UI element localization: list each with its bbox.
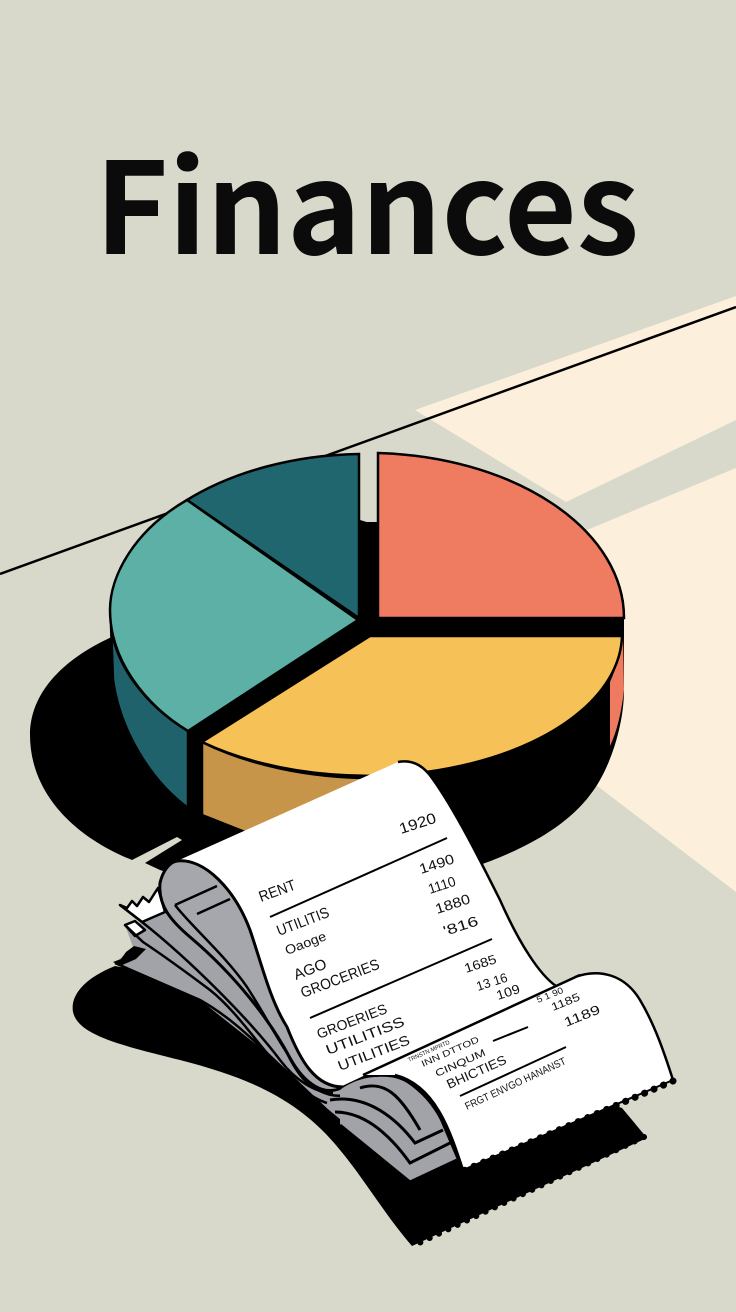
back sheets: grey body [115, 905, 360, 1140]
horizon line [0, 307, 736, 574]
fold detail lines [175, 886, 347, 1096]
pie chart [110, 453, 624, 850]
labels block: UTILITIS [274, 904, 332, 940]
amounts column: 1110 [426, 873, 458, 897]
title: Finances [95, 107, 639, 291]
amount 1920: 1920 [397, 810, 438, 838]
labels block: GROCERIES [298, 956, 382, 1002]
amounts column [417, 850, 480, 939]
light beam: upper [415, 296, 736, 502]
labels block: AGO [291, 956, 329, 984]
receipt top text [257, 810, 522, 1074]
back sheet: second tab [125, 921, 145, 936]
back sheet: black torn tip [113, 946, 146, 966]
flap labels: INN DTTOD [420, 1034, 481, 1069]
divider 2 [310, 939, 492, 1018]
pie black base [112, 522, 624, 850]
labels block [274, 904, 382, 1002]
flap labels: BHICTIES [444, 1052, 509, 1092]
lower flap stack lines [330, 1086, 457, 1182]
flap amounts: 5 1 90 [535, 985, 565, 1005]
flap labels: FRGT ENVGO HANANST [463, 1055, 568, 1113]
back sheet edge lines [115, 905, 345, 1125]
light beam: lower [570, 468, 736, 892]
receipt shadow serrated edge [417, 1137, 644, 1244]
slice: coral [378, 453, 624, 618]
pie side: dark teal [111, 625, 188, 808]
flap labels [407, 1034, 568, 1113]
slice: yellow [202, 636, 622, 776]
amounts column 2: 1685 [462, 951, 498, 976]
amounts column: 1490 [417, 850, 456, 877]
flap dividers [460, 1027, 566, 1096]
top sheet bottom edge [343, 975, 580, 1087]
slice: dark teal [187, 454, 359, 618]
amounts column 2: 109 [494, 981, 522, 1003]
pie chart shadow [30, 520, 624, 880]
slice: light teal [110, 500, 358, 731]
back sheet: torn white tip [120, 888, 165, 922]
labels block 2: UTILITIES [335, 1032, 412, 1074]
top sheet white [177, 761, 600, 1087]
receipt [113, 761, 673, 1182]
receipt shadow [73, 966, 647, 1246]
labels block 2 [314, 1000, 412, 1074]
lower flap white [363, 973, 673, 1170]
amounts column 2: 13 16 [474, 970, 509, 994]
top sheet right edge [398, 761, 556, 986]
divider 1 [270, 838, 447, 917]
pie side: ochre [202, 742, 370, 832]
amounts column: 1880 [433, 890, 472, 917]
lower flap text [407, 985, 602, 1113]
flap amounts [535, 985, 602, 1030]
pie side: coral [610, 636, 624, 746]
amounts column 2 [462, 951, 522, 1003]
lower flap grey stack [340, 1077, 457, 1182]
label RENT: RENT [257, 877, 298, 906]
labels block: Oaoge [283, 928, 328, 958]
labels block 2: UTILITISS [323, 1013, 407, 1058]
flap labels: CINQUM [434, 1048, 488, 1080]
flap amounts: 1189 [562, 1002, 602, 1030]
flap amounts: 1185 [550, 991, 582, 1014]
lower flap serrated edge [463, 1080, 673, 1171]
flap labels: TRNSTN MPRTD [407, 1040, 451, 1064]
amounts column: '816 [441, 912, 480, 939]
lower flap outline [363, 973, 673, 1170]
labels block 2: GROERIES [314, 1000, 389, 1042]
top sheet fold: grey underside [160, 861, 343, 1090]
